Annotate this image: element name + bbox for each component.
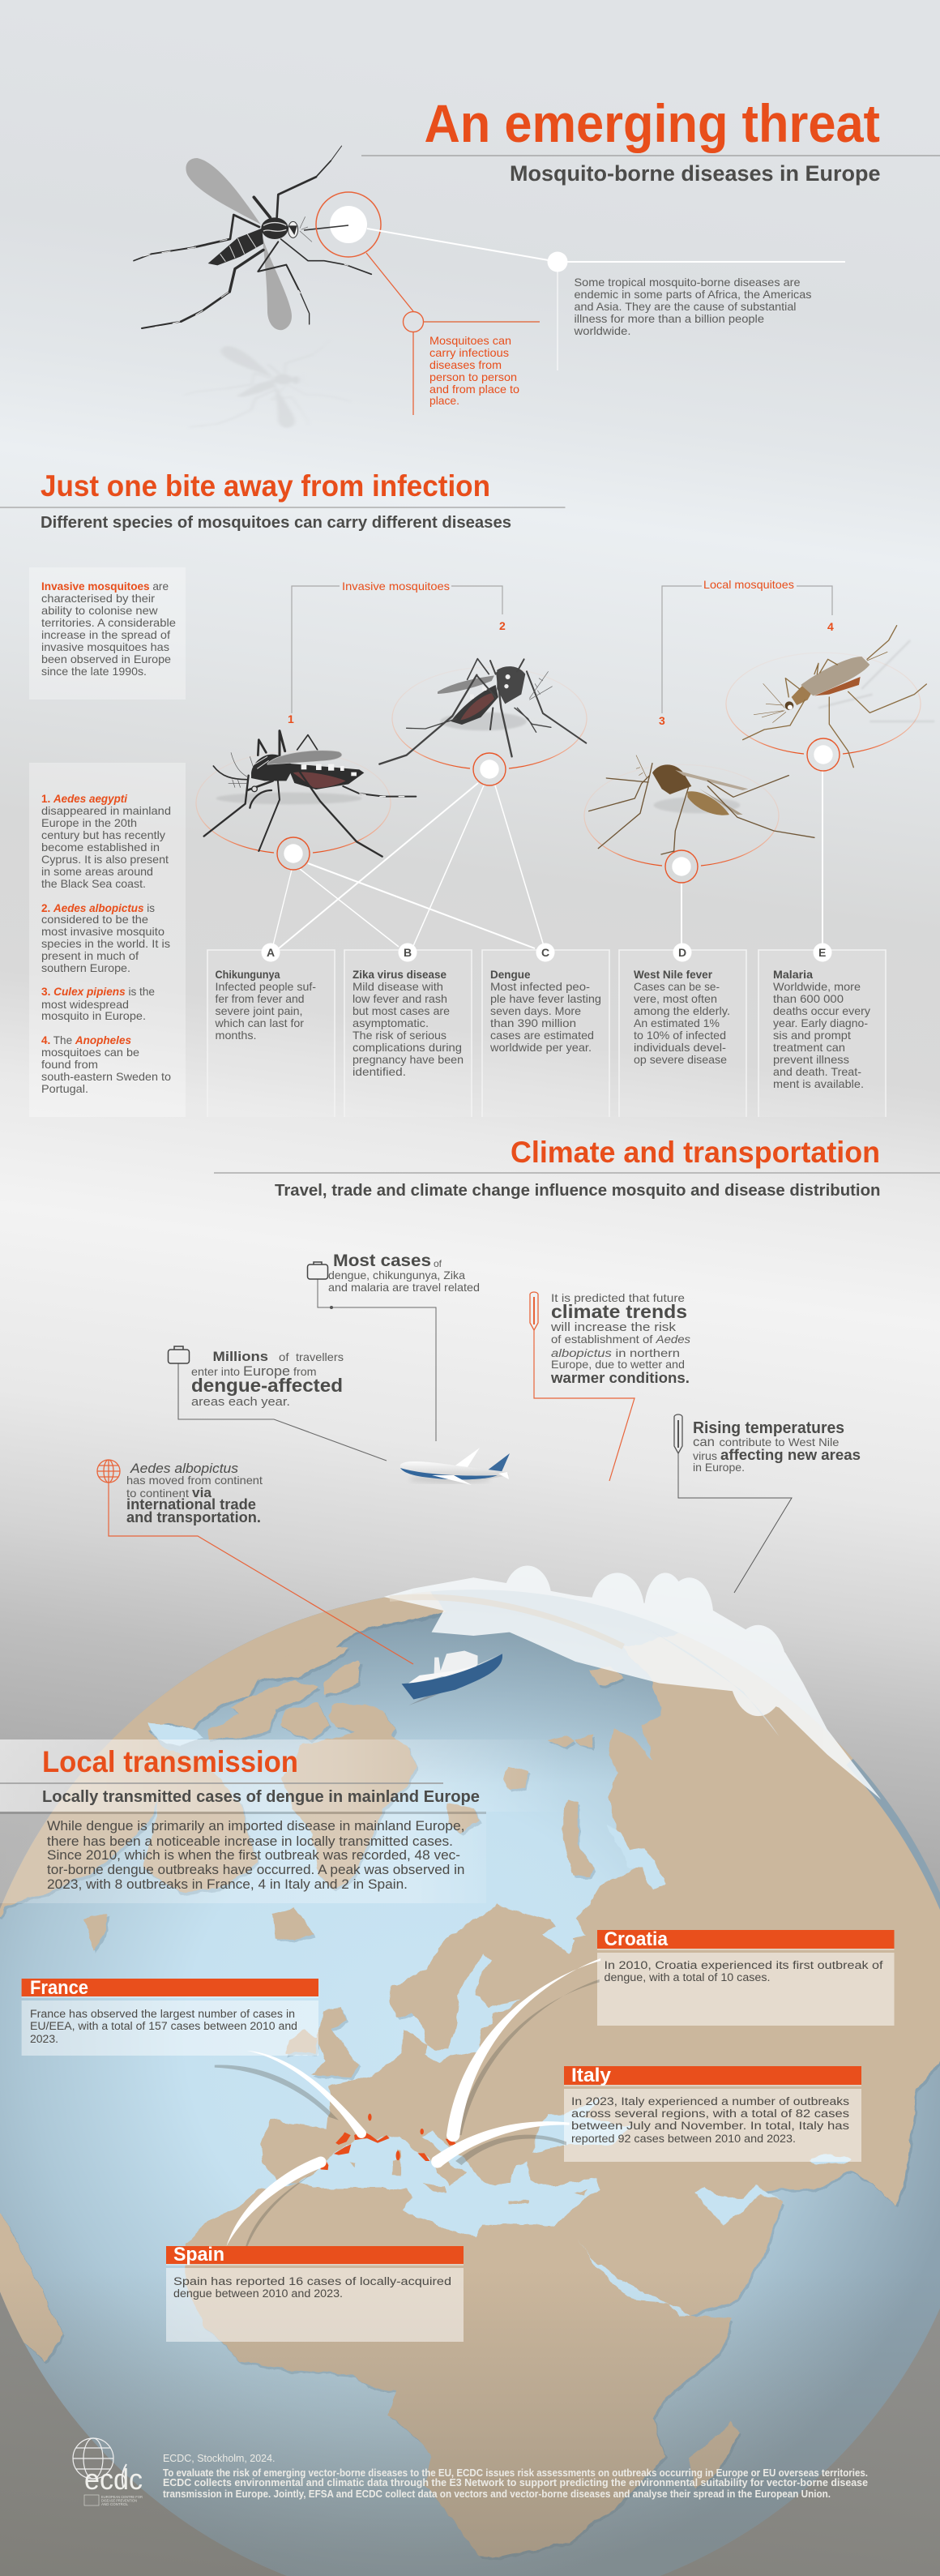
callout: most cases	[308, 1252, 480, 1441]
panel: mosquito species: the Black Sea coast.	[41, 877, 146, 890]
text: albopictus in northern	[551, 1346, 680, 1359]
disease card E: malaria: year. Early diagno-	[773, 1016, 868, 1029]
panel: Italy: between July and November. In total, Italy has	[571, 2120, 849, 2132]
text: and transportation.	[126, 1509, 261, 1525]
mosquito	[134, 146, 371, 330]
heading rule	[0, 1782, 443, 1784]
icon: thermometer	[530, 1292, 538, 1330]
right limb sea	[846, 1759, 940, 1910]
panel: Italy	[564, 2065, 861, 2162]
disease card A: chikungunya: months.	[216, 1029, 256, 1042]
subheading: Travel, trade and climate change influence mosquito and disease distribution	[275, 1182, 880, 1200]
panel: France: France has observed the largest number of cases in	[30, 2008, 295, 2020]
panel: mosquito species: southern Europe.	[41, 961, 130, 974]
disease card B: zika: pregnancy have been	[352, 1053, 464, 1066]
text: international trade	[126, 1496, 256, 1513]
panel: mosquito species	[29, 763, 186, 1117]
text: enter into	[191, 1365, 240, 1378]
number: 2	[499, 619, 506, 632]
text: from	[293, 1365, 316, 1378]
text: climate trends	[551, 1301, 687, 1322]
panel: Italy: reported 92 cases between 2010 and 2023.	[571, 2133, 796, 2145]
panel: mosquito species: found from	[41, 1058, 98, 1071]
connector	[366, 253, 413, 415]
subheading: Locally transmitted cases of dengue in mainland Europe	[42, 1788, 480, 1806]
panel: invasive mosquitoes: ability to colonise new	[41, 604, 158, 617]
panel: invasive mosquitoes: increase in the spread of	[41, 628, 170, 641]
title rule	[361, 155, 940, 156]
bottom shading	[19, 2309, 924, 2576]
disease card E: malaria: Malaria	[773, 968, 813, 981]
panel: mosquito species: Europe in the 20th	[41, 816, 137, 829]
main mosquito illustration	[134, 146, 381, 428]
text: travellers	[296, 1350, 344, 1363]
arcs to outbreak locations	[215, 1958, 600, 2246]
disease card C: dengue: Dengue	[490, 968, 531, 981]
panel: mosquito species: 3. Culex pipiens is the	[41, 985, 155, 998]
callout text	[429, 334, 519, 407]
connector lines to diseases	[272, 770, 822, 948]
callout text: Some tropical mosquito-borne diseases are	[574, 276, 801, 289]
callout: endemic diseases	[367, 229, 845, 370]
bracket: invasive mosquitoes	[292, 580, 502, 713]
disease card D: west nile fever: individuals devel-	[634, 1041, 726, 1054]
heading rule	[214, 1172, 940, 1174]
callout text: carry infectious	[429, 346, 509, 359]
text: has moved from continent	[126, 1474, 263, 1487]
panel: local transmission intro: Since 2010, which is when the first outbreak was recorded, 48 vec-	[47, 1848, 460, 1863]
panel: mosquito species: century but has recently	[41, 828, 165, 841]
text: areas each year.	[191, 1395, 290, 1409]
disease card C: dengue: seven days. More	[490, 1004, 581, 1017]
mosquito 1: Aedes aegypti	[196, 712, 416, 870]
mediterranean islands	[349, 2150, 588, 2203]
dot	[480, 760, 499, 779]
disease card E: malaria: Worldwide, more	[773, 980, 861, 993]
panel: Spain	[166, 2244, 464, 2342]
callout text: and Asia. They are the cause of substantial	[574, 300, 796, 313]
clouds	[383, 1566, 881, 1799]
disease card C: dengue: than 390 million	[490, 1016, 576, 1029]
panel: local transmission heading band	[0, 1739, 567, 1814]
callout text: illness for more than a billion people	[574, 312, 764, 325]
logo	[73, 2438, 143, 2506]
panel: mosquito species: species in the world. It is	[41, 937, 170, 950]
text: contribute to West Nile	[720, 1436, 840, 1448]
panel: mosquito species: south-eastern Sweden to	[41, 1070, 171, 1083]
text: Most cases	[333, 1252, 431, 1270]
icon: thermometer	[674, 1414, 682, 1453]
leader line	[318, 1279, 436, 1441]
disease card A: chikungunya: Chikungunya	[216, 968, 280, 981]
text: will increase the risk	[550, 1320, 677, 1334]
logo: DISEASE PREVENTION	[101, 2498, 137, 2503]
text: Aedes albopictus	[130, 1461, 239, 1476]
insect	[379, 659, 586, 764]
disease card B: zika: low fever and rash	[352, 992, 447, 1005]
panel: Croatia: In 2010, Croatia experienced its first outbreak of	[605, 1959, 883, 1971]
arcs	[227, 1958, 600, 2246]
globe	[0, 1545, 940, 2576]
panel: mosquito species: mosquito in Europe.	[41, 1009, 146, 1022]
logo: ecdc	[84, 2463, 143, 2496]
disease card C: dengue: Most infected peo-	[490, 980, 590, 993]
disease card D: west nile fever	[619, 944, 746, 1117]
panel: mosquito species: mosquitoes can be	[41, 1046, 139, 1059]
text: warmer conditions.	[550, 1370, 690, 1386]
panel: France: EU/EEA, with a total of 157 cases between 2010 and	[30, 2020, 297, 2032]
panel: France: France	[30, 1977, 88, 1999]
land	[0, 1545, 940, 2557]
text	[693, 1419, 861, 1474]
callout text: endemic in some parts of Africa, the Americas	[574, 288, 812, 301]
bracket: local mosquitoes	[662, 578, 832, 713]
disease card A: chikungunya: A	[267, 946, 275, 959]
panel: mosquito species: Portugal.	[41, 1082, 88, 1095]
ellipse	[196, 751, 391, 853]
ellipse	[392, 667, 587, 768]
dot	[672, 857, 691, 876]
disease card A: chikungunya: fer from fever and	[216, 992, 305, 1005]
disease card B: zika: but most cases are	[352, 1004, 450, 1017]
panel: mosquito species: Cyprus. It is also present	[41, 853, 169, 866]
text: of	[434, 1258, 442, 1269]
panel: mosquito species: considered to be the	[41, 913, 148, 926]
leader line	[109, 1483, 413, 1664]
disease card E: malaria: sis and prompt	[773, 1029, 851, 1042]
text: can	[693, 1436, 715, 1449]
panel: invasive mosquitoes: characterised by their	[41, 592, 155, 605]
callout text: worldwide.	[573, 324, 630, 337]
credits: ECDC, Stockholm, 2024.	[163, 2452, 276, 2464]
text: of	[279, 1350, 289, 1363]
pointer ring	[316, 192, 381, 257]
disease card C: dengue: ple have fever lasting	[490, 992, 601, 1005]
disease card D: west nile fever: among the elderly.	[634, 1004, 730, 1017]
disease card B: zika: Zika virus disease	[352, 968, 446, 981]
text: and malaria are travel related	[328, 1281, 480, 1294]
mosquito shadow	[184, 340, 351, 428]
callout: climate trends	[530, 1291, 690, 1481]
leader line	[678, 1453, 792, 1593]
text: Millions	[212, 1349, 268, 1364]
band shadow	[0, 1812, 486, 1814]
logo: AND CONTROL	[101, 2502, 129, 2506]
panel: mosquito species: disappeared in mainland	[41, 804, 171, 817]
logo: EUROPEAN CENTRE FOR	[101, 2495, 143, 2499]
pointer dot white	[330, 206, 367, 243]
disease card E: malaria: and death. Treat-	[773, 1065, 861, 1078]
proboscis	[304, 225, 348, 230]
number: 3	[659, 714, 665, 727]
footer	[73, 2438, 868, 2506]
inland seas	[150, 1723, 851, 2317]
disease card C: dengue: worldwide per year.	[489, 1041, 592, 1054]
disease card A: chikungunya	[207, 944, 335, 1117]
footer text	[163, 2467, 868, 2500]
disease card D: west nile fever: West Nile fever	[634, 968, 713, 981]
number: 1	[288, 712, 294, 725]
text: It is predicted that future	[551, 1291, 685, 1304]
panel: invasive mosquitoes: since the late 1990s.	[41, 665, 147, 678]
callout text	[573, 276, 812, 337]
panel: mosquito species: present in much of	[41, 949, 139, 962]
text: via	[192, 1485, 212, 1500]
insect	[589, 755, 814, 854]
callout text: person to person	[429, 370, 517, 383]
panel: mosquito species: most widespread	[41, 998, 129, 1011]
panel: local transmission intro	[0, 1814, 486, 1903]
title: An emerging threat	[425, 93, 880, 153]
heading: Climate and transportation	[511, 1136, 880, 1169]
text	[126, 1461, 263, 1525]
disease card E: malaria: treatment can	[773, 1041, 845, 1054]
panel: mosquito species: 4. The Anopheles	[41, 1033, 131, 1046]
disease card B: zika: asymptomatic.	[352, 1016, 429, 1029]
panel: Croatia: Croatia	[605, 1928, 669, 1950]
disease card B: zika: The risk of serious	[352, 1029, 446, 1042]
disease card A: chikungunya: Infected people suf-	[216, 980, 316, 993]
text: Europe, due to wetter and	[551, 1358, 685, 1371]
disease card C: dengue: C	[541, 946, 549, 959]
disease card B: zika: Mild disease with	[352, 980, 443, 993]
panel: Spain: Spain	[173, 2244, 224, 2266]
panel: mosquito species: 1. Aedes aegypti	[41, 792, 128, 805]
insect	[204, 731, 416, 857]
coastlines	[0, 1545, 940, 2560]
bracket: local mosquitoes: Local mosquitoes	[703, 578, 794, 591]
disease card D: west nile fever: to 10% of infected	[634, 1029, 726, 1042]
disease card D: west nile fever: D	[678, 946, 686, 959]
panel: Italy: In 2023, Italy experienced a number of outbreaks	[571, 2095, 849, 2107]
disease card E: malaria	[758, 944, 886, 1117]
text	[191, 1349, 344, 1409]
panel: local transmission intro: tor-borne dengue outbreaks have occurred. A peak was observed in	[47, 1863, 465, 1877]
ship	[402, 1651, 502, 1705]
panel: mosquito species: in some areas around	[41, 865, 153, 878]
mosquito 3: Culex pipiens	[584, 714, 814, 883]
text: affecting new areas	[720, 1447, 861, 1463]
panel: France: 2023.	[30, 2033, 58, 2045]
mosquito 2: Aedes albopictus	[379, 619, 587, 785]
callout text: Mosquitoes can	[429, 334, 511, 347]
heading rule	[0, 507, 566, 508]
disease card B: zika: identified.	[352, 1065, 406, 1078]
insect	[743, 626, 934, 768]
disease card E: malaria: deaths occur every	[773, 1004, 870, 1017]
bracket: invasive mosquitoes: Invasive mosquitoes	[342, 580, 450, 593]
callout: millions of travellers	[169, 1346, 387, 1461]
disease card E: malaria: than 600 000	[773, 992, 844, 1005]
panel: Italy: Italy	[571, 2065, 612, 2086]
panel: mosquito species: become established in	[41, 841, 160, 854]
disease card A: chikungunya: severe joint pain,	[216, 1004, 303, 1017]
leader line	[534, 1329, 634, 1481]
polar sea shading	[149, 1597, 661, 1754]
disease card E: malaria: E	[818, 946, 826, 959]
land shadow	[0, 1547, 940, 2560]
section heading: climate and transportation	[214, 1136, 940, 1200]
heading: Local transmission	[42, 1745, 298, 1778]
panel: invasive mosquitoes: invasive mosquitoes has	[41, 640, 169, 653]
footer text: To evaluate the risk of emerging vector-borne diseases to the EU, ECDC issues risk assessments on outbreaks occurring in Europe or EU overseas territories.	[163, 2467, 868, 2479]
panel: local transmission intro: there has been a noticeable increase in locally transmitted cases.	[47, 1834, 453, 1849]
panel: Croatia	[597, 1928, 895, 2026]
text: in Europe.	[693, 1461, 745, 1474]
ellipse	[584, 764, 779, 866]
callout: international trade	[97, 1460, 413, 1664]
panel: local transmission intro: While dengue is primarily an imported disease in mainland Europe,	[47, 1819, 465, 1834]
footer text: ECDC collects environmental and climatic data through the E3 Network to support predicting the environmental suitability for vector-borne disease	[163, 2477, 868, 2488]
disease card D: west nile fever: An estimated 1%	[634, 1016, 720, 1029]
disease card A: chikungunya: which can last for	[214, 1016, 304, 1029]
panel: local transmission intro: 2023, with 8 outbreaks in France, 4 in Italy and 2 in Spain.	[47, 1877, 408, 1892]
callout text: place.	[429, 394, 459, 407]
subtitle: Mosquito-borne diseases in Europe	[510, 161, 880, 186]
text: to continent	[126, 1487, 189, 1500]
vertical stem	[557, 262, 558, 370]
panel: Croatia: dengue, with a total of 10 cases.	[605, 1971, 770, 1983]
disease card B: zika: complications during	[352, 1041, 462, 1054]
arc shadows	[215, 1979, 600, 2246]
text: Rising temperatures	[693, 1419, 844, 1437]
disease card E: malaria: ment is available.	[773, 1077, 864, 1090]
panel: Spain: dengue between 2010 and 2023.	[173, 2287, 343, 2300]
disease card B: zika: B	[404, 946, 412, 959]
subheading: Different species of mosquitoes can carry different diseases	[41, 514, 511, 532]
leader line	[178, 1363, 387, 1461]
text: dengue, chikungunya, Zika	[328, 1269, 465, 1282]
ring	[665, 850, 698, 883]
disease card D: west nile fever: vere, most often	[634, 992, 717, 1005]
callout: infectious diseases	[366, 253, 540, 415]
airplane	[400, 1448, 510, 1485]
ring	[277, 837, 310, 870]
connector	[367, 229, 845, 262]
panel: Spain: Spain has reported 16 cases of locally-acquired	[173, 2275, 451, 2287]
dot	[814, 745, 833, 764]
ring	[473, 753, 506, 785]
text: of establishment of Aedes	[551, 1333, 690, 1346]
disease card C: dengue: cases are estimated	[490, 1029, 594, 1042]
disease card D: west nile fever: op severe disease	[634, 1053, 727, 1066]
disease card E: malaria: prevent illness	[773, 1053, 849, 1066]
text: dengue-affected	[191, 1375, 343, 1396]
rule	[424, 321, 540, 323]
text: virus	[693, 1449, 717, 1462]
number: 4	[827, 620, 834, 633]
dot	[284, 844, 303, 863]
icon: suitcase	[308, 1262, 327, 1279]
callout text: diseases from	[429, 358, 502, 371]
header section	[361, 93, 940, 186]
panel: invasive mosquitoes: Invasive mosquitoes are	[41, 580, 169, 593]
ring	[807, 738, 840, 771]
panel: mosquito species: 2. Aedes albopictus is	[41, 901, 155, 914]
text	[328, 1252, 480, 1294]
text: Europe	[243, 1364, 290, 1379]
panel: invasive mosquitoes: been observed in Europe	[41, 653, 171, 665]
icon: globe	[97, 1460, 120, 1483]
mosquito 4: Anopheles	[726, 620, 934, 771]
ellipse	[726, 653, 921, 754]
icon: suitcase	[169, 1346, 190, 1363]
callout dot	[548, 251, 567, 272]
callout ring	[404, 311, 423, 332]
panel: invasive mosquitoes: territories. A considerable	[41, 616, 176, 629]
panel: invasive mosquitoes	[29, 567, 186, 700]
heading: Just one bite away from infection	[41, 469, 490, 503]
disease card C: dengue	[482, 944, 609, 1117]
footer text: transmission in Europe. Jointly, EFSA and ECDC collect data on vectors and vector-borne diseases and analyse their spread in the European Union.	[163, 2488, 831, 2500]
panel: France	[22, 1977, 318, 2056]
section heading: just one bite	[0, 469, 566, 532]
text	[550, 1291, 690, 1386]
panel: Italy: across several regions, with a total of 82 cases	[571, 2107, 849, 2120]
outbreak areas	[319, 2114, 457, 2170]
disease card B: zika	[344, 944, 472, 1117]
disease card D: west nile fever: Cases can be se-	[634, 980, 720, 993]
callout: rising temperatures	[674, 1414, 861, 1593]
panel: mosquito species: most invasive mosquito	[41, 925, 164, 938]
callout text: and from place to	[429, 383, 519, 396]
